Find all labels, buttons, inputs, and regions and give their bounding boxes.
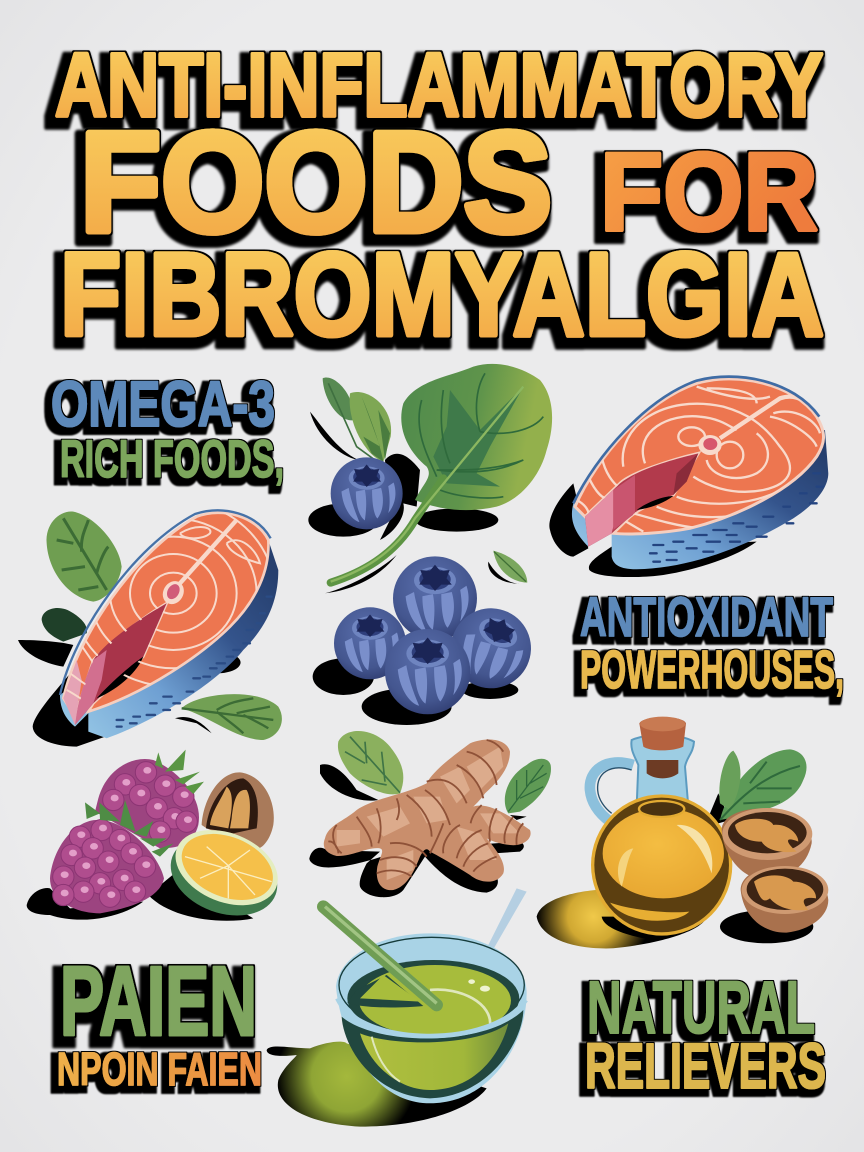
cluster shadows <box>313 658 518 725</box>
oil globe <box>591 794 732 936</box>
lower leaf <box>175 694 282 740</box>
lower walnut <box>741 866 828 933</box>
far spoon <box>483 888 527 955</box>
cork <box>647 760 678 778</box>
spinach and blueberry sprig <box>308 364 552 725</box>
salmon steak with leaves, left <box>18 500 282 747</box>
side <box>60 540 278 738</box>
label: Omega-3 rich foods <box>51 368 284 489</box>
small floating leaf <box>488 551 527 584</box>
wedge <box>585 453 698 547</box>
label: Omega-3 rich foods: OMEGA-3 <box>51 368 275 440</box>
root <box>324 740 531 890</box>
wedge <box>75 603 167 725</box>
berries, walnut and citrus <box>27 750 289 930</box>
shadows <box>309 764 527 897</box>
label: Paien: PAIEN <box>60 946 257 1056</box>
upper raspberry <box>95 750 204 848</box>
label: Paien: NPOIN FAIEN <box>57 1043 262 1095</box>
green spoon <box>323 907 437 1005</box>
face <box>63 513 268 717</box>
face <box>575 379 824 534</box>
shadows <box>18 640 241 747</box>
label: Natural relievers <box>585 966 826 1102</box>
shadows <box>537 890 707 948</box>
shadow <box>267 1042 487 1127</box>
rings <box>577 387 820 532</box>
bowl <box>336 933 527 1103</box>
title <box>55 36 824 361</box>
single blueberry <box>331 457 403 529</box>
handle <box>590 762 633 822</box>
olive oil flask and walnuts <box>537 717 828 948</box>
lower raspberry <box>50 800 173 913</box>
shadows <box>308 412 498 593</box>
small leaves <box>323 378 391 462</box>
shadow <box>549 483 757 577</box>
label: Antioxidant powerhouses <box>580 585 844 700</box>
ginger root with leaves <box>309 731 551 897</box>
right leaf <box>505 759 551 813</box>
center spot <box>159 577 188 608</box>
salmon steak, upper right <box>549 377 828 577</box>
center spot <box>698 435 722 455</box>
leaves <box>710 749 807 823</box>
walnut <box>202 772 274 849</box>
side <box>572 430 828 569</box>
glass neck <box>631 735 694 807</box>
label: Paien <box>57 946 262 1095</box>
green tea bowl with spoons <box>267 888 527 1127</box>
rings <box>67 500 275 700</box>
left leaf <box>338 731 403 794</box>
title line: FOODS: FOODS <box>80 103 552 262</box>
blueberry cluster <box>334 556 544 714</box>
label: Omega-3 rich foods: RICH FOODS, <box>60 430 284 489</box>
spinach leaf <box>401 364 552 510</box>
top-left leaf <box>47 512 122 602</box>
title word: FOR: FOR <box>600 131 818 254</box>
stem and midrib <box>331 478 443 583</box>
citrus half <box>160 816 289 930</box>
dark leaf <box>42 608 87 642</box>
shadows <box>27 872 253 921</box>
upper walnut <box>722 808 812 880</box>
